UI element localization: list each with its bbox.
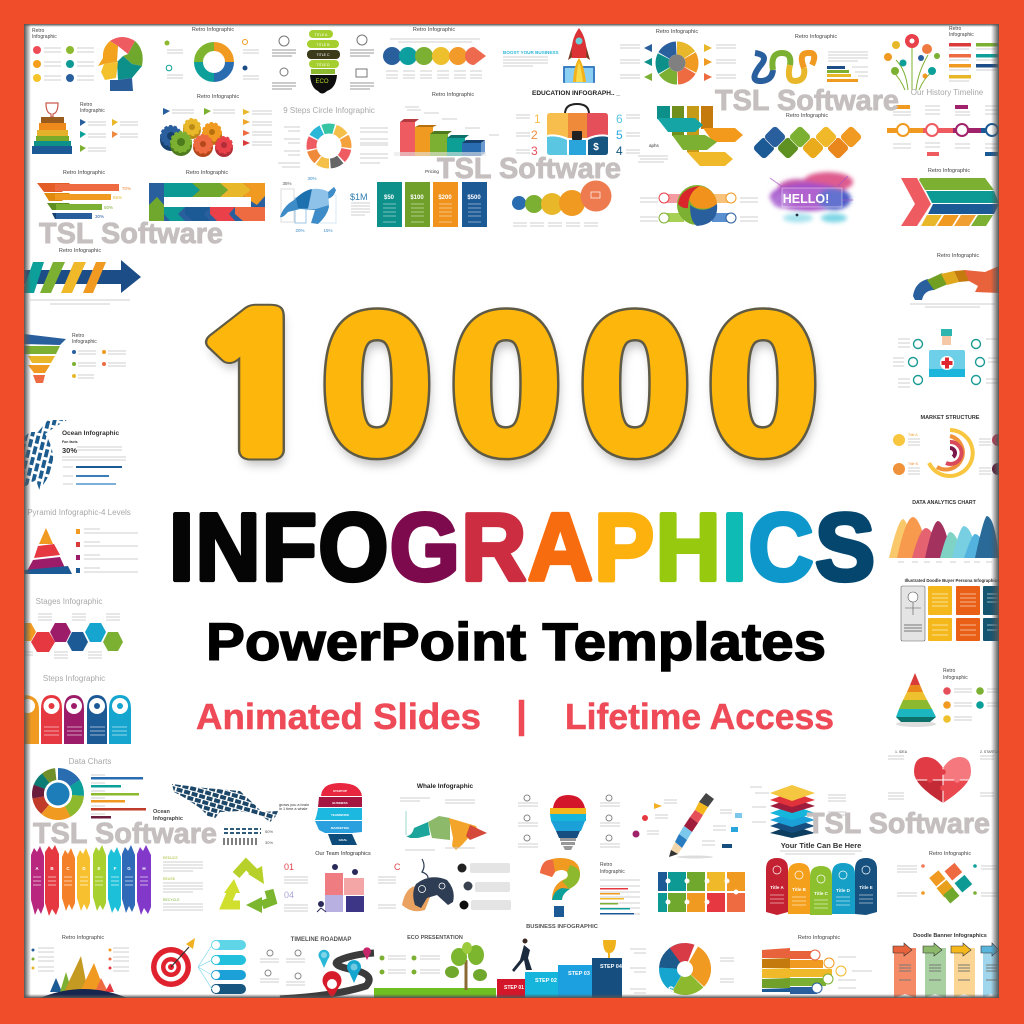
watermarks: TSL Software (807, 808, 990, 840)
headline 10000: 1 (190, 296, 324, 480)
education briefcase infographic: 4 (616, 144, 623, 158)
circular arrows infographic (164, 27, 259, 79)
paint brush strokes infographic: G (127, 866, 131, 871)
tree infographic: Retro (949, 26, 961, 32)
turtle infographic: 20% (295, 228, 305, 233)
team puzzle infographic (284, 851, 401, 912)
recycle infographic: REUSE (163, 877, 176, 881)
your title can be here tabs infographic: Title E (859, 885, 873, 890)
watermarks (33, 85, 990, 850)
paint brush strokes infographic: F (114, 866, 117, 871)
recycle infographic: RECYCLE (163, 898, 180, 902)
headline 10000: 0000 (324, 280, 820, 501)
funnel bars infographic: 55% (113, 195, 122, 200)
chevron fishbone infographic: Retro Infographic (928, 168, 970, 174)
ocean turtle mosaic infographic: 30% (62, 446, 77, 455)
funnel bars infographic: Retro Infographic (63, 170, 105, 176)
team puzzle infographic: Our Team Infographics (315, 851, 371, 857)
recycle infographic (163, 856, 272, 913)
whale infographic: Whale Infographic (417, 783, 474, 790)
ocean whale mosaic infographic: Infographic (153, 816, 183, 822)
3d pyramid infographic: Infographic (943, 675, 968, 681)
recycle infographic: REDUCE (163, 856, 178, 860)
chevron frame infographic (149, 170, 265, 221)
headline 10000: 0000 (322, 273, 818, 494)
business steps infographic: BUSINESS INFOGRAPHIC (526, 924, 599, 930)
six circles process infographic (383, 27, 486, 78)
education briefcase infographic: EDUCATION INFOGRAPH.. _ (532, 90, 620, 97)
eco presentation infographic (374, 935, 496, 998)
3d pyramid infographic: Retro (943, 668, 955, 674)
eco light bulb infographic: ECO (315, 79, 329, 85)
subtitle PowerPoint Templates: PowerPoint Templates (206, 613, 826, 672)
s-curve infographic with bars: Retro Infographic (795, 34, 837, 40)
gears infographic: Retro Infographic (197, 94, 239, 100)
history timeline: Our History Timeline (911, 88, 984, 97)
market structure infographic: MARKET STRUCTURE (921, 415, 980, 421)
your title can be here tabs infographic: Title A (770, 885, 784, 890)
ocean whale mosaic infographic: 50% (265, 829, 273, 834)
chevron fishbone infographic (901, 168, 999, 226)
stacked head infographic: BUSINESS (332, 801, 348, 805)
pricing tables: Pricing (425, 169, 439, 174)
folded layers infographic (762, 935, 872, 994)
pricing tables: $200 (438, 195, 452, 201)
ocean whale mosaic infographic: 30% (265, 840, 273, 845)
heart puzzle infographic (888, 750, 1001, 803)
your title can be here tabs infographic: Title D (836, 888, 851, 893)
doodle banner infographics: Doodle Banner Infographics (913, 933, 987, 939)
growing circles infographic (512, 180, 612, 226)
curved arrow infographic: Retro Infographic (937, 253, 979, 259)
ocean turtle mosaic infographic (24, 420, 126, 490)
steps tabs infographic: Steps Infographic (43, 674, 105, 683)
colored jigsaw cluster infographic (897, 851, 997, 903)
hexagon circle infographic (620, 29, 736, 83)
feature line: Animated Slides (196, 696, 481, 737)
eco light bulb infographic: TITLE B (317, 43, 330, 47)
watermarks: TSL Software (33, 818, 217, 850)
stacked head infographic: STARTUP (333, 789, 347, 793)
steps tabs infographic (21, 674, 131, 744)
ocean whale mosaic infographic (153, 784, 309, 845)
turtle infographic: 15% (323, 228, 333, 233)
paint brush strokes infographic: B (50, 866, 54, 871)
arrows strips infographic: aphs (649, 143, 660, 148)
3d pyramid infographic (896, 668, 999, 727)
circular arrows infographic: Retro Infographic (192, 27, 234, 33)
market structure infographic (893, 415, 1004, 476)
s-curve infographic with bars (754, 34, 868, 82)
pricing tables (377, 169, 487, 227)
eco presentation infographic: ECO PRESENTATION (407, 935, 463, 941)
gears infographic (160, 94, 272, 157)
trophy pyramid infographic: Retro (80, 102, 92, 108)
turtle infographic: $1M (350, 192, 368, 202)
boost your business text (503, 50, 559, 66)
turtle infographic: 35% (282, 181, 292, 186)
persona infographic: Illustrated Doodle Buyer Persona Infographics (905, 578, 1000, 583)
market structure infographic: Title B (908, 462, 918, 466)
education briefcase infographic: 3 (531, 144, 538, 158)
ribbon arrow infographic (24, 248, 141, 304)
curved arrow infographic (910, 253, 999, 307)
stacked head infographic: TEAMWORK (331, 813, 350, 817)
ocean whale mosaic infographic: grows you a brain (279, 803, 309, 807)
rocket on tablet (563, 28, 595, 83)
pyramid 4 levels infographic (24, 508, 138, 574)
heart puzzle infographic: 2. STARTUP (980, 750, 1001, 754)
history timeline (887, 88, 999, 156)
timeline roadmap infographic (260, 937, 374, 999)
heart puzzle infographic: 1. IDEA (895, 750, 908, 754)
team puzzle infographic: 04 (284, 890, 294, 900)
watermarks: TSL Software (437, 153, 621, 185)
education briefcase infographic: 1 (534, 112, 541, 126)
business steps infographic: STEP 03 (568, 971, 590, 977)
team puzzle infographic: 01 (284, 862, 294, 872)
market structure infographic: Title A (908, 433, 918, 437)
data charts infographic: Data Charts (69, 757, 111, 766)
target infographic (151, 938, 246, 994)
funnel bars infographic: 50% (104, 205, 113, 210)
question mark infographic: Retro (600, 862, 612, 868)
3d bars infographic: Retro Infographic (432, 92, 474, 98)
education briefcase infographic: 2 (531, 128, 538, 142)
head puzzle infographic: Infographic (32, 34, 57, 40)
medical case infographic (893, 329, 999, 387)
light bulb infographic (518, 795, 620, 850)
data analytics chart (889, 500, 999, 562)
headline 10000: 0000 (322, 273, 818, 494)
education briefcase infographic: $ (593, 142, 599, 153)
paint brush strokes infographic: D (82, 866, 86, 871)
headline 10000: 1 (190, 296, 324, 480)
paint brush strokes infographic (31, 845, 151, 916)
head puzzle infographic (32, 28, 143, 91)
business steps infographic: STEP 01 (504, 985, 524, 991)
eco light bulb infographic: TITLE C (316, 53, 330, 57)
shutter circle infographic (661, 945, 734, 997)
paint brush strokes infographic: E (97, 866, 101, 871)
diamonds infographic: Retro Infographic (786, 113, 828, 119)
tree infographic (884, 26, 998, 90)
your title can be here tabs infographic: Your Title Can Be Here (781, 841, 861, 850)
funnel infographic left (24, 333, 126, 383)
ocean whale mosaic infographic: in 1 time a whale (279, 807, 308, 811)
persona infographic (901, 578, 1000, 641)
paint brush strokes infographic: A (35, 866, 39, 871)
six circles process infographic: Retro Infographic (413, 27, 455, 33)
whale infographic (400, 783, 487, 850)
pricing tables: $50 (384, 195, 395, 201)
education briefcase infographic (516, 90, 640, 158)
pricing tables: $100 (410, 195, 424, 201)
business steps infographic (497, 924, 646, 998)
eco light bulb infographic: TITLE D (316, 63, 330, 67)
turtle infographic (280, 176, 370, 233)
pyramid 4 levels infographic: Pyramid Infographic-4 Levels (27, 508, 131, 517)
tree infographic: Infographic (949, 32, 974, 38)
watermarks: TSL Software (715, 85, 899, 117)
funnel bars infographic: 70% (122, 186, 131, 191)
data charts infographic (30, 757, 146, 822)
eco light bulb infographic: TITLE A (315, 33, 328, 37)
funnel infographic left: Retro (72, 333, 84, 339)
mountain infographic: Retro Infographic (62, 935, 104, 941)
game controller infographic (402, 859, 511, 911)
paint brush strokes infographic: C (66, 866, 70, 871)
9 steps circle infographic (278, 106, 388, 171)
watermarks: TSL Software (39, 218, 223, 250)
funnel infographic left: Infographic (72, 339, 97, 345)
layer stack infographic (750, 785, 846, 838)
your title can be here tabs infographic: Title C (814, 891, 829, 896)
stacked head infographic (315, 783, 362, 845)
business steps infographic: STEP 04 (600, 964, 623, 970)
timeline roadmap infographic: TIMELINE ROADMAP (291, 937, 351, 943)
headline INFOGRAPHICS: INFOGRAPHICS (169, 494, 875, 601)
ocean turtle mosaic infographic: Ocean Infographic (62, 430, 119, 437)
eco light bulb infographic (272, 30, 374, 94)
chevron frame infographic: Retro Infographic (186, 170, 228, 176)
education briefcase infographic: 5 (616, 128, 623, 142)
jigsaw grid infographic (658, 872, 745, 912)
stages hexagon infographic: Stages Infographic (36, 597, 102, 606)
hexagon circle infographic: Retro Infographic (656, 29, 698, 35)
your title can be here tabs infographic (766, 841, 877, 915)
funnel bars infographic (37, 170, 131, 219)
9 steps circle infographic: 9 Steps Circle Infographic (283, 106, 375, 115)
question mark infographic (540, 858, 640, 917)
ocean turtle mosaic infographic: Fun facts (62, 440, 78, 444)
your title can be here tabs infographic: Title B (792, 887, 807, 892)
feature line: Lifetime Access (565, 696, 834, 737)
data analytics chart: DATA ANALYTICS CHART (912, 500, 977, 506)
question mark infographic: Infographic (600, 869, 625, 875)
turtle infographic: 30% (307, 176, 317, 181)
arrows strips infographic (638, 106, 743, 166)
education briefcase infographic: 6 (616, 112, 623, 126)
ribbon arrow infographic: Retro Infographic (59, 248, 101, 254)
folded layers infographic: Retro Infographic (798, 935, 840, 941)
shutter circle infographic: $ (668, 985, 674, 997)
3d bars infographic (394, 92, 499, 156)
pencil infographic (632, 793, 742, 858)
ocean whale mosaic infographic: Ocean (153, 809, 170, 815)
mountain infographic (32, 935, 129, 998)
pricing tables: $500 (467, 195, 481, 201)
stages hexagon infographic (24, 597, 123, 658)
colored jigsaw cluster infographic: Retro Infographic (929, 851, 971, 857)
hello watercolor splash: HELLO! (783, 192, 829, 206)
business steps infographic: STEP 02 (535, 978, 557, 984)
head puzzle infographic: Retro (32, 28, 44, 34)
hello watercolor splash (770, 172, 853, 222)
boost your business text: BOOST YOUR BUSINESS (503, 50, 559, 55)
trophy pyramid infographic (32, 102, 138, 154)
diamonds infographic (752, 113, 863, 160)
paint brush strokes infographic: H (142, 866, 146, 871)
feature line (196, 696, 834, 737)
headline 10000: 1 (192, 303, 326, 487)
stacked head infographic: GOAL (339, 838, 347, 842)
trophy pyramid infographic: Infographic (80, 108, 105, 114)
team puzzle infographic: C (394, 862, 401, 872)
3d sphere infographic (640, 185, 758, 226)
doodle banner infographics (893, 933, 999, 998)
stacked head infographic: MARKETING (331, 826, 350, 830)
funnel bars infographic: 30% (95, 214, 104, 219)
